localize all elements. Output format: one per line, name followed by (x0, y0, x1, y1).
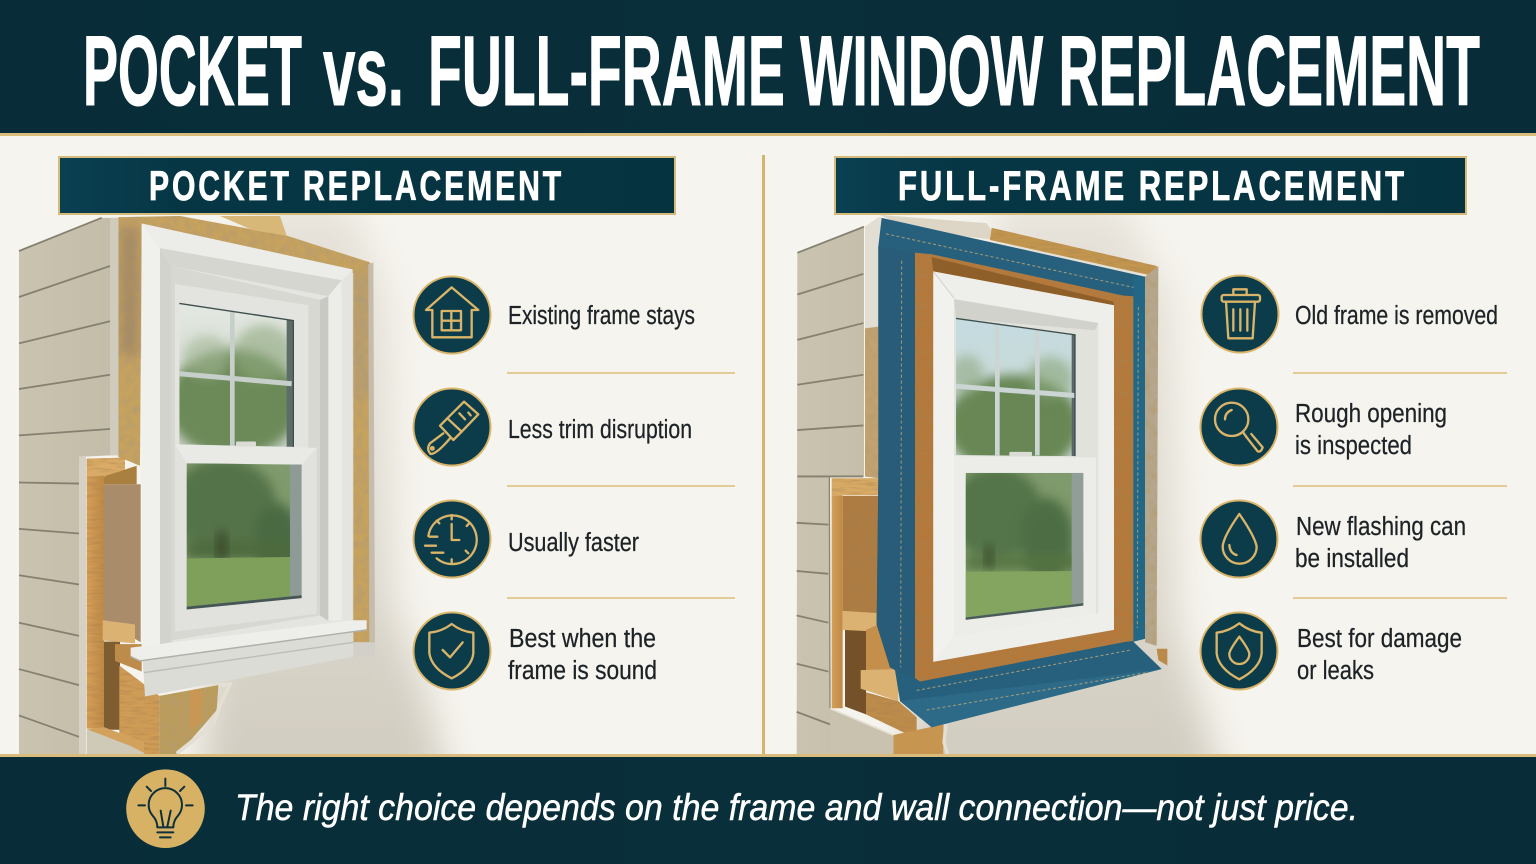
rough edges (865, 215, 1167, 665)
insulation (118, 216, 374, 642)
feature list: pocket (414, 276, 735, 690)
centre divider (762, 155, 765, 755)
item: best for damage or leaks: Best for damage (1297, 625, 1462, 653)
item: new flashing can be installed: be installed (1295, 545, 1409, 573)
framing (832, 478, 948, 756)
panel: pocket replacement (19, 157, 735, 790)
title banner (0, 0, 1536, 136)
item: new flashing can be installed: New flashing can (1296, 513, 1466, 541)
illustration: full-frame window with flashing (797, 205, 1225, 790)
item: old frame is removed: Old frame is removed (1295, 302, 1498, 330)
panel: full-frame replacement (797, 157, 1507, 790)
item: existing frame stays (414, 276, 695, 354)
lower sash (954, 456, 1096, 636)
blue flashing (877, 218, 1162, 727)
item: old frame is removed (1202, 276, 1498, 352)
section heading: full-frame (835, 157, 1466, 214)
footer banner (0, 754, 1536, 864)
white window frame (933, 271, 1114, 662)
upper sash glass (956, 319, 1074, 456)
upper sash (175, 284, 308, 450)
item: rough opening is inspected: is inspected (1295, 432, 1412, 460)
illustration: pocket window installed in wall (19, 205, 450, 790)
item: existing frame stays: Existing frame stays (508, 302, 695, 330)
title: vs. (323, 15, 404, 126)
item: less trim disruption: Less trim disruption (508, 416, 692, 444)
lower sash (175, 444, 317, 632)
sill (131, 620, 375, 697)
framing (104, 484, 141, 642)
footer message: The right choice depends on the frame and wall connection—not just price. (235, 787, 1358, 828)
item: best for damage or leaks: or leaks (1297, 657, 1374, 685)
section heading: pocket: POCKET REPLACEMENT (149, 162, 564, 209)
window trim (142, 224, 353, 647)
item: usually faster: Usually faster (508, 529, 639, 557)
feature list: full-frame (1200, 276, 1507, 690)
section heading: pocket (59, 157, 675, 214)
item: usually faster (414, 500, 639, 578)
icon: light bulb (126, 769, 205, 848)
item: less trim disruption (414, 388, 692, 466)
item: rough opening is inspected (1200, 388, 1447, 466)
item: best for damage or leaks (1200, 612, 1462, 690)
upper grid (956, 323, 1075, 455)
siding (19, 218, 118, 756)
item: best when the frame is sound: Best when the (509, 625, 656, 653)
item: best when the frame is sound (414, 612, 657, 690)
upper muntins (179, 311, 292, 446)
item: best when the frame is sound: frame is sound (508, 657, 657, 685)
item: new flashing can be installed (1200, 500, 1466, 578)
siding (797, 227, 893, 756)
title: POCKET (83, 15, 302, 126)
item: rough opening is inspected: Rough opening (1295, 400, 1447, 428)
wood buck (915, 253, 1133, 682)
